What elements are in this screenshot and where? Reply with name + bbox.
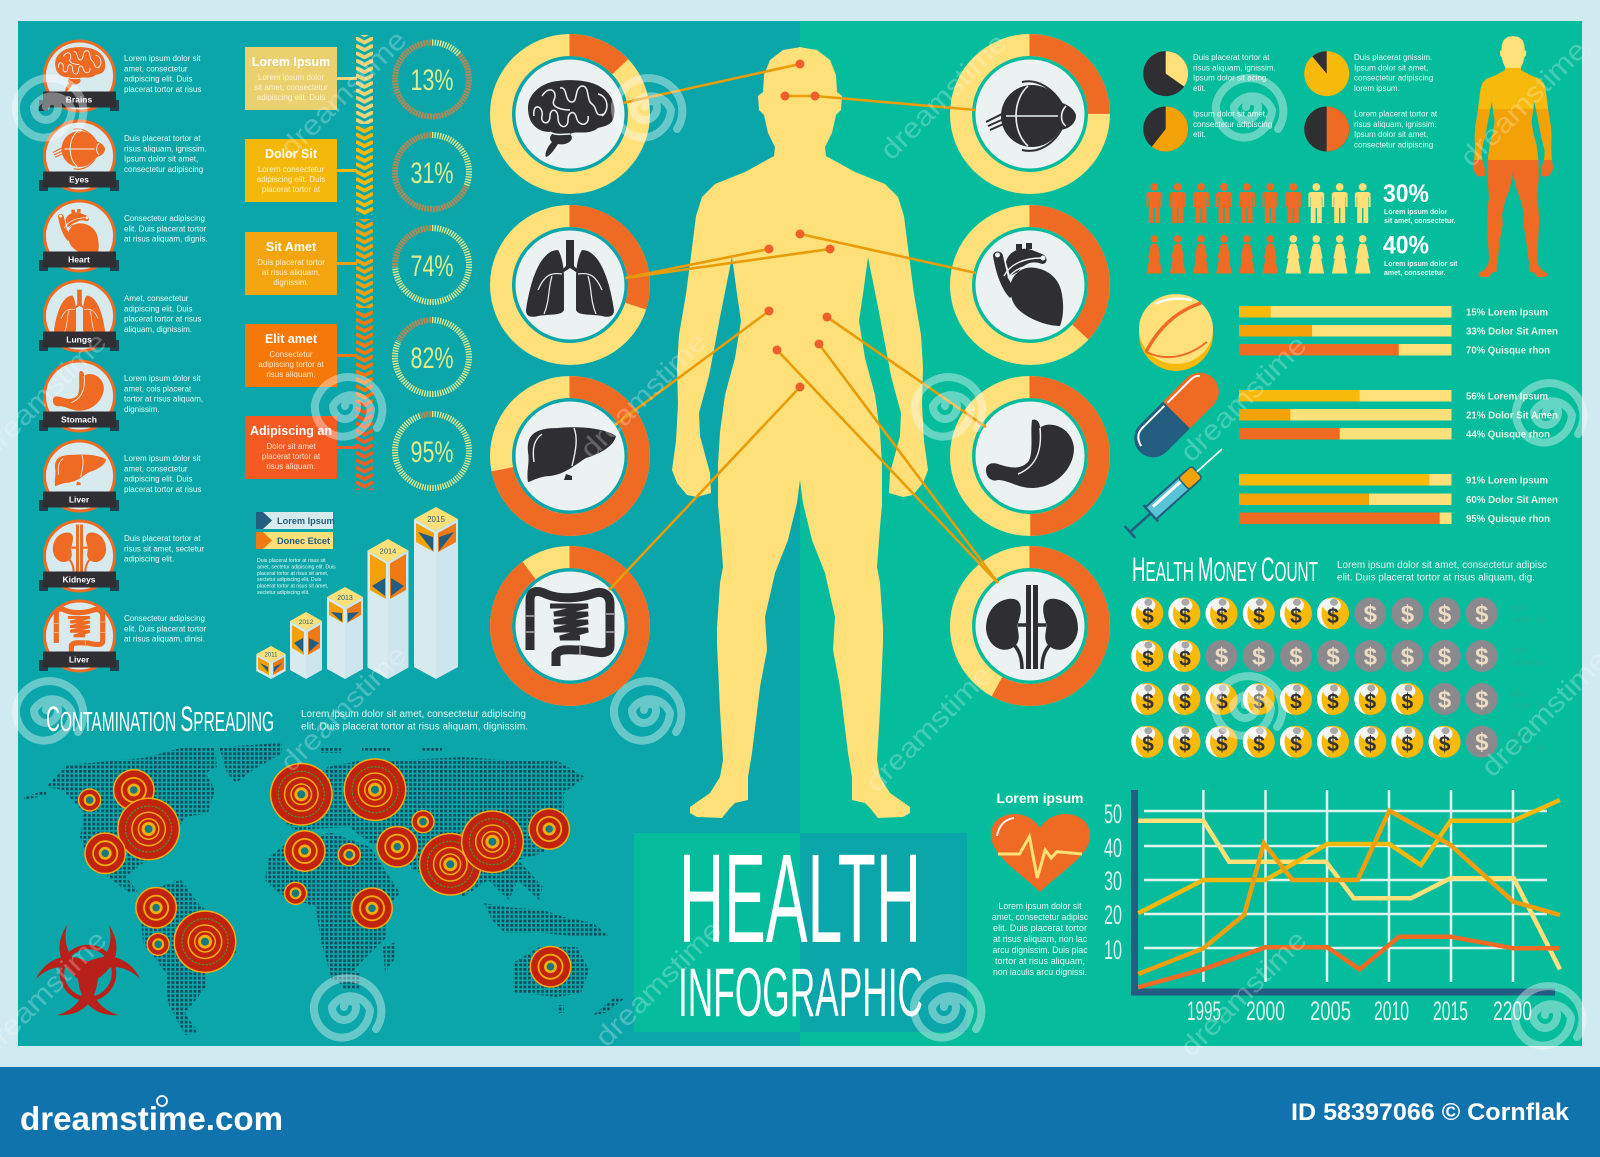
line chart: [1104, 790, 1560, 1026]
panel: left teal background: [18, 21, 800, 1046]
x axis labels: [1187, 996, 1532, 1026]
step box: Dolor Sit: placerat tortor at: [262, 185, 321, 194]
percent rings: [395, 42, 469, 488]
step box: Lorem Ipsum: [245, 47, 337, 110]
watermark text: dreamstime: [274, 639, 413, 778]
coin row 2: [1131, 640, 1545, 672]
heart description: Lorem ipsum dolor sit: [998, 901, 1082, 911]
legend and small text: placerat tortor at risus sit amet,: [257, 571, 328, 577]
organ item: brains: adipiscing elit. Duis: [124, 75, 192, 84]
organ item: liver (intestine icon): Consectetur adipiscing: [124, 614, 205, 623]
coin row 3: [1131, 683, 1545, 715]
heart block: [991, 790, 1090, 977]
step box: Elit amet: [245, 324, 337, 387]
coin row 1: $: [1364, 601, 1378, 628]
y axis labels: 20: [1104, 900, 1122, 930]
x axis labels: 2000: [1246, 996, 1285, 1026]
progress bars group 1: 70% Quisque rhon: [1466, 346, 1550, 356]
x axis labels: 1995: [1187, 996, 1221, 1026]
coin row 3: $: [1179, 690, 1191, 714]
ring 82%: 82%: [410, 342, 454, 375]
series: gold: [1138, 800, 1560, 913]
coin row 3: $: [1290, 690, 1302, 714]
step box: Adipiscing an: Dolor sit amet: [266, 442, 316, 451]
organ item: liver: adipiscing elit. Duis: [124, 475, 192, 484]
legend and small text: Lorem Ipsum: [277, 516, 335, 526]
step box: Adipiscing an: placerat tortor at: [262, 452, 321, 461]
donut: stomach: [961, 387, 1099, 525]
ring 95%: [395, 414, 469, 488]
ring 74%: [395, 228, 469, 302]
coin row 2: $: [1252, 644, 1266, 670]
isometric bar chart: [256, 507, 458, 679]
coin row 4: [1131, 726, 1545, 758]
step box: Dolor Sit: [245, 139, 337, 202]
organ item: kidneys: adipiscing elit.: [124, 555, 174, 564]
pie caption text: Lorem placerat tortor at: [1354, 110, 1438, 118]
coin row 2: Lorem ips: [1510, 658, 1545, 667]
coin row 4: $: [1402, 733, 1414, 756]
y axis labels: [1104, 799, 1122, 965]
pie caption text: Duis placerat gnissim.: [1354, 53, 1432, 62]
step box: Sit Amet: at risus aliquam,: [262, 268, 320, 277]
bar 2015: [414, 507, 458, 679]
legend and small text: placerat tortor at risus sit amet,: [257, 584, 328, 590]
contamination description: elit. Duis placerat tortor at risus aliquam, dignissim.: [301, 722, 528, 732]
coin row 3: $: [1402, 690, 1414, 714]
organ item: eyes: Ipsum dolor sit amet,: [124, 155, 198, 164]
legend and small text: sectetur adipiscing elit.: [257, 590, 309, 596]
coin row 4: Lorem ips: [1510, 743, 1545, 752]
coin row 2: $: [1438, 644, 1452, 670]
progress bars group 1: 33% Dolor Sit Amen: [1466, 326, 1558, 338]
donut rings with organs: [501, 45, 1099, 695]
human body silhouette: [672, 47, 928, 818]
organ item: liver (intestine icon): at risus aliquam, dinisi.: [124, 635, 205, 644]
legend and small text: Duis placerat tortor at risus sit: [257, 558, 326, 564]
organ item: lungs: Lungs: [66, 334, 92, 344]
pie caption text: consectetur adipiscing: [1354, 74, 1433, 83]
organ item: heart: at risus aliquam, dignis.: [124, 235, 208, 244]
step box: Lorem Ipsum: Lorem ipsum dolor: [258, 73, 324, 82]
dotted world map: [18, 735, 638, 1040]
coin row 2: $: [1401, 644, 1415, 670]
organ item: eyes: Duis placerat tortor at: [124, 134, 201, 143]
pie caption text: lorem ipsum.: [1354, 84, 1400, 93]
organ item: brains: amet, consectetur: [124, 64, 188, 73]
stat: 30%: Lorem ipsum dolor: [1384, 209, 1448, 216]
footer band: [0, 1067, 1600, 1157]
coin row 1: $: [1216, 605, 1228, 628]
donut: liver: [501, 387, 639, 525]
donut: brain: [501, 45, 639, 183]
organ item: liver: amet, consectetur: [124, 464, 188, 473]
icon: heart with ECG line: [991, 814, 1090, 892]
people pictogram: women: [1146, 235, 1370, 274]
legend and small text: [256, 512, 336, 596]
y axis labels: 50: [1104, 799, 1122, 829]
pie caption text: consectetur adipiscing: [1193, 120, 1272, 129]
organ item: stomach: tortor at risus aliquam,: [124, 395, 203, 404]
progress bars group 3: 95% Quisque rhon: [1466, 514, 1550, 525]
step box: Elit amet: adipiscing tortor at: [258, 360, 324, 369]
watermark text: dreamstime: [859, 659, 998, 798]
contamination description: Lorem ipsum dolor sit amet, consectetur adipiscing: [301, 709, 526, 720]
bar 2014: [368, 539, 408, 679]
coin row 4: $: [1253, 733, 1265, 756]
bar 2011: 2011: [265, 652, 278, 658]
panel: right green background: [800, 21, 1582, 1046]
coin row 3: $: [1216, 690, 1228, 714]
organ item: liver (intestine icon): [39, 601, 207, 671]
organ item: brains: placerat tortor at risus: [124, 85, 201, 94]
stat: 40%: 40%: [1383, 232, 1429, 260]
coin row 1: $: [1290, 605, 1302, 628]
coin row 1: 65 %: [1510, 604, 1528, 613]
pie caption text: Duis placerat tortor at: [1193, 53, 1270, 62]
organ item: liver: Lorem ipsum dolor sit: [124, 454, 201, 463]
watermark text: dreamstime: [874, 27, 1013, 166]
title block: [634, 828, 967, 1032]
watermark text: dreamstime: [274, 24, 413, 163]
small man figure: [1473, 36, 1553, 277]
icon: biohazard: [32, 925, 144, 1022]
organ item: kidneys: [39, 521, 204, 591]
step box: Dolor Sit: Dolor Sit: [265, 147, 318, 161]
coin row 4: $: [1179, 733, 1191, 756]
coin row 4: $: [1327, 733, 1339, 756]
coin row 3: $: [1475, 686, 1489, 714]
coin row 1: $: [1438, 601, 1452, 628]
y axis labels: 10: [1104, 935, 1122, 965]
coin row 3: $: [1327, 690, 1339, 714]
progress bars group 2: 56% Lorem Ipsum: [1466, 392, 1548, 402]
organ item: stomach: Stomach: [61, 414, 97, 424]
coin row 4: $: [1290, 733, 1302, 756]
ring 31%: [395, 135, 469, 209]
organ item: liver: placerat tortor at risus: [124, 485, 201, 494]
coin row 2: $: [1142, 648, 1154, 670]
panel: organ list: [39, 41, 208, 671]
icon: capsule: [1126, 365, 1227, 465]
connector lines from body to organs: [609, 64, 998, 590]
coin row 4: $: [1216, 733, 1228, 756]
stat: 40%: Lorem ipsum dolor sit: [1384, 261, 1458, 268]
y axis labels: 40: [1104, 833, 1122, 863]
legend and small text: Donec Etcet: [277, 536, 330, 546]
stat: 30%: [1383, 180, 1456, 225]
coin row 1: $: [1401, 601, 1415, 628]
organ item: stomach: amet, cois placerat: [124, 384, 192, 393]
organ item: liver: [39, 441, 201, 511]
legend and small text: amet, sectetur adipiscing elit. Duis: [257, 564, 336, 570]
donut: intestine: [501, 557, 639, 695]
organ item: heart: Heart: [68, 254, 90, 264]
ring 31%: 31%: [410, 157, 454, 190]
heart description: elit. Duis placerat tortor: [993, 923, 1087, 933]
organ item: kidneys: Duis placerat tortor at: [124, 534, 201, 543]
organ item: eyes: consectetur adipiscing: [124, 165, 203, 174]
organ item: liver: Liver: [69, 494, 90, 504]
step box: Lorem Ipsum: adipiscing elit. Duis: [257, 93, 325, 102]
icon: tablet: [1139, 294, 1213, 371]
coin row 3: 80 %: [1510, 690, 1528, 699]
pie: bottom right: [1304, 106, 1349, 152]
pie caption text: risus aliquam, ignissim.: [1354, 120, 1437, 129]
coin row 2: 23 %: [1510, 647, 1528, 656]
heart description: arcu dignissim. Duis plac: [992, 945, 1088, 955]
pie caption text: Ipsum dolor sit amet,: [1354, 130, 1428, 139]
heart description: non iaculis arcu dignissi.: [993, 967, 1087, 977]
heart heading: Lorem ipsum: [996, 790, 1084, 806]
step box: Elit amet: Consectetur: [269, 350, 313, 359]
organ item: lungs: placerat tortor at risus: [124, 315, 201, 324]
bar 2014: 2014: [380, 546, 396, 556]
bar 2011: [256, 646, 286, 679]
series: amber: [1138, 811, 1560, 974]
coin row 2: $: [1475, 644, 1489, 670]
step box: Lorem Ipsum: Lorem Ipsum: [252, 55, 330, 69]
title block: HEALTH: [679, 828, 921, 969]
pie caption text: Ipsum dolor sit acing: [1193, 74, 1266, 83]
watermark text: dreamstime: [1174, 924, 1313, 1063]
heart description: tortor at risus aliquam,: [995, 956, 1085, 966]
series: orange: [1138, 937, 1560, 987]
money description: Lorem ipsum dolor sit amet, consectetur adipisc: [1337, 560, 1547, 571]
pie caption text: risus aliquam, ignissim.: [1193, 63, 1276, 72]
step box: Sit Amet: Sit Amet: [266, 240, 317, 254]
coin row 3: $: [1364, 690, 1376, 714]
coin row 3: $: [1438, 686, 1452, 714]
step box: Elit amet: Elit amet: [265, 332, 318, 346]
progress bars group 2: [1239, 390, 1558, 440]
organ item: eyes: risus aliquam, ignissim.: [124, 144, 207, 153]
pie charts: [1143, 51, 1438, 152]
stat: 30%: 30%: [1383, 180, 1429, 208]
coin row 4: $: [1475, 729, 1489, 756]
organ item: stomach: Lorem ipsum dolor sit: [124, 374, 201, 383]
coin row 1: $: [1253, 605, 1265, 628]
organ item: lungs: [39, 281, 201, 351]
organ item: liver (intestine icon): Liver: [69, 654, 90, 664]
donut: eye: [961, 45, 1099, 183]
progress bars group 2: 44% Quisque rhon: [1466, 430, 1550, 440]
coin row 1: $: [1327, 605, 1339, 628]
heart description: amet, consectetur adipisc: [992, 912, 1088, 922]
money description: elit. Duis placerat tortor at risus aliquam, dig.: [1337, 572, 1535, 584]
people pictogram: men: [1146, 183, 1371, 223]
coin row 1: $: [1142, 605, 1154, 628]
pie caption text: Ipsum dolor sit amet,: [1354, 63, 1428, 72]
progress bars group 1: 15% Lorem Ipsum: [1466, 308, 1548, 318]
x axis labels: 2200: [1493, 996, 1532, 1026]
donut: lungs: [501, 216, 639, 354]
step box: Lorem Ipsum: sit amet, consectetur: [254, 83, 328, 92]
organ item: lungs: aliquam, dignissim.: [124, 325, 192, 334]
progress bars group 2: 21% Dolor Sit Amen: [1466, 410, 1558, 422]
organ item: eyes: [39, 121, 207, 191]
footer logo: dreamstime.com: [20, 1100, 283, 1137]
ring 74%: 74%: [410, 250, 454, 283]
organ item: kidneys: Kidneys: [62, 574, 96, 584]
footer image id: ID 58397066 © Cornflak: [1291, 1099, 1570, 1126]
x axis labels: 2010: [1374, 996, 1409, 1026]
chevron column with connectors: [337, 35, 373, 490]
coin row 2: $: [1289, 644, 1303, 670]
watermark text: dreamstime: [574, 326, 713, 465]
watermark text: dreamstime: [1174, 329, 1313, 468]
y axis labels: 30: [1104, 866, 1122, 896]
coin row 3: $: [1253, 690, 1265, 714]
ring 95%: 95%: [410, 436, 454, 469]
progress bars group 3: 60% Dolor Sit Amen: [1466, 495, 1558, 506]
organ item: heart: elit. Duis placerat tortor: [124, 224, 207, 233]
step box: Adipiscing an: risus aliquam.: [266, 462, 316, 471]
coin row 4: $: [1364, 733, 1376, 756]
pie caption text: consectetur adipiscing: [1354, 140, 1433, 149]
organ item: heart: [39, 201, 208, 271]
stat: 40%: amet, consectetur.: [1384, 270, 1446, 277]
step box: Dolor Sit: adipiscing elit. Duis: [257, 175, 325, 184]
organ item: kidneys: risus sit amet, sectetur: [124, 544, 204, 553]
bar 2015: 2015: [427, 515, 445, 524]
ring 13%: 13%: [410, 64, 454, 97]
coin row 2: $: [1364, 644, 1378, 670]
step box: Sit Amet: Duis placerat tortor: [257, 258, 325, 267]
coin row 1: Lorem ips: [1510, 615, 1545, 624]
organ item: brains: Lorem ipsum dolor sit: [124, 54, 201, 63]
step box: Dolor Sit: Lorem consectetur: [258, 165, 324, 174]
series: yellow: [1138, 821, 1560, 969]
progress bars group 1: [1239, 306, 1558, 356]
watermark text: dreamstime: [589, 914, 728, 1053]
step box: Adipiscing an: Adipiscing an: [250, 424, 332, 438]
bar 2013: 2013: [337, 595, 353, 602]
bar 2013: [327, 587, 363, 679]
map outbreak targets: [78, 758, 572, 988]
organ item: eyes: Eyes: [69, 174, 89, 184]
pie: top left: [1143, 51, 1188, 96]
progress bars group 3: 91% Lorem Ipsum: [1466, 476, 1548, 486]
organ item: brains: [39, 41, 201, 111]
step boxes: [245, 47, 337, 479]
ring 13%: [395, 42, 469, 116]
organ item: brains: Brains: [66, 94, 92, 104]
step box: Sit Amet: dignissim.: [273, 278, 309, 287]
subtitle: infographic: INFOGRAPHIC: [678, 954, 923, 1031]
ring 82%: [395, 320, 469, 394]
coin row 1: $: [1179, 605, 1191, 628]
pie: top right: [1304, 51, 1349, 96]
step box: Sit Amet: [245, 232, 337, 295]
watermark text: dreamstime: [1475, 644, 1600, 783]
coin row 4: $: [1142, 733, 1154, 756]
stat: 40%: [1383, 232, 1458, 277]
pie caption text: [1193, 53, 1438, 149]
pie caption text: Ipsum dolor sit amet,: [1193, 110, 1267, 118]
body location dots: [764, 60, 834, 392]
progress bars group 3: [1239, 474, 1558, 525]
step box: Elit amet: risus aliquam,: [266, 370, 316, 379]
bar 2012: 2012: [299, 619, 314, 626]
coin row 3: $: [1142, 690, 1154, 714]
x axis labels: 2005: [1310, 996, 1351, 1026]
organ item: lungs: Amet, consectetur: [124, 294, 189, 303]
coin row 4: 90 %: [1510, 732, 1528, 741]
coin row 1: [1131, 597, 1545, 629]
organ item: heart: Consectetur adipiscing: [124, 214, 205, 223]
organ item: lungs: adipiscing elit. Duis: [124, 304, 192, 313]
heading: contamination spreading: CONTAMINATION SPREADING: [46, 700, 274, 739]
organ item: stomach: dignissim.: [124, 405, 160, 414]
heart description: at risus aliquam, non lac: [993, 934, 1087, 944]
donut: kidneys: [961, 557, 1099, 695]
donut: heart: [961, 216, 1099, 354]
coin row 1: $: [1475, 601, 1489, 628]
bar 2012: [290, 612, 322, 679]
pie: bottom left: [1143, 106, 1188, 152]
coin row 3: Lorem ips: [1510, 701, 1545, 710]
chart axes: [1134, 790, 1555, 992]
coin row 2: $: [1326, 644, 1340, 670]
stat: 30%: sit amet, consectetur.: [1384, 218, 1456, 225]
pie caption text: etit.: [1193, 130, 1206, 139]
coin row 2: $: [1179, 648, 1191, 670]
x axis labels: 2015: [1433, 996, 1468, 1026]
pie caption text: etit.: [1193, 84, 1206, 93]
organ item: liver (intestine icon): elit. Duis placerat tortor: [124, 624, 207, 633]
organ item: stomach: [39, 361, 203, 431]
legend and small text: sectetur adipiscing elit. Duis: [257, 577, 322, 583]
coin row 4: $: [1439, 733, 1451, 756]
coin row 2: $: [1215, 644, 1229, 670]
watermark text: dreamstime: [1454, 34, 1593, 173]
heading: health money count: HEALTH MONEY COUNT: [1132, 551, 1318, 589]
icon: syringe: [1123, 441, 1230, 540]
step box: Adipiscing an: [245, 416, 337, 479]
